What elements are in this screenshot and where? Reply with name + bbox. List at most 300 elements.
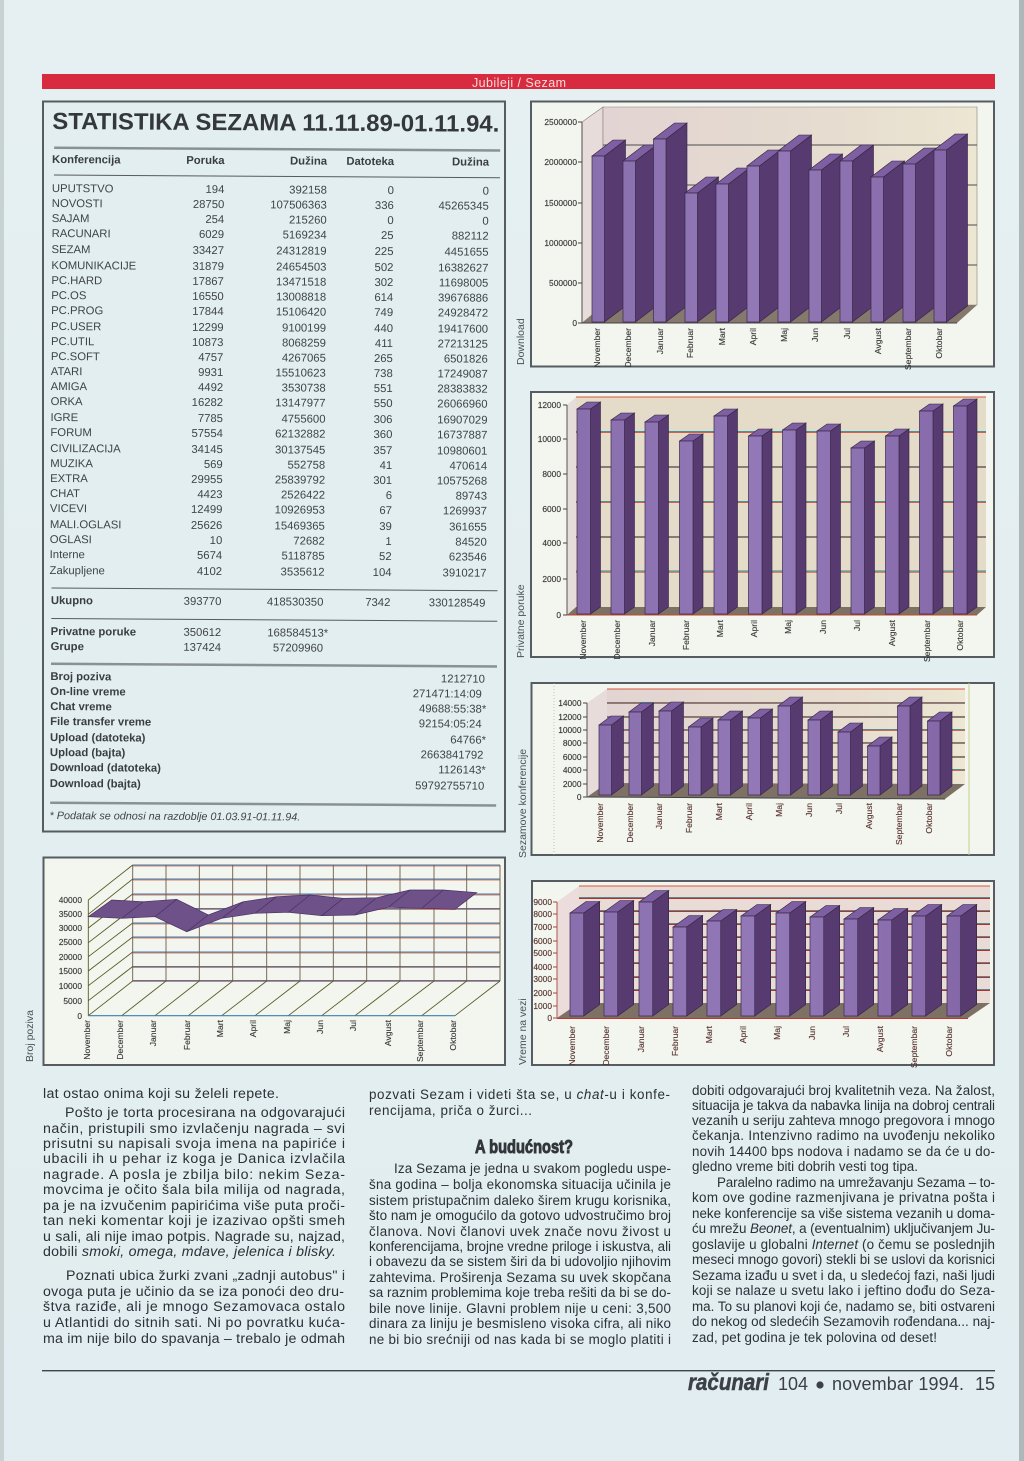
table rows: conferences: 5674 bbox=[197, 550, 222, 562]
table rows: conferences: 24654503 bbox=[276, 261, 326, 274]
month labels: Septembar bbox=[415, 1020, 425, 1062]
table rows: conferences: 738 bbox=[374, 368, 393, 380]
table rows: conferences: 614 bbox=[374, 292, 393, 304]
table rows: conferences: 0 bbox=[387, 215, 394, 227]
month labels: Jul bbox=[834, 803, 844, 814]
y axis labels: 6000 bbox=[542, 504, 561, 514]
table rows: conferences: 569 bbox=[204, 459, 223, 471]
table rows: conferences: 4492 bbox=[198, 382, 223, 394]
table rows: conferences: NOVOSTI bbox=[52, 198, 103, 210]
article column 3 bbox=[692, 1083, 995, 1345]
table rows: conferences: 392158 bbox=[289, 184, 327, 197]
table rows: conferences: 11698005 bbox=[439, 277, 488, 290]
private messages and groups rows bbox=[51, 626, 329, 655]
table rows: conferences: 12499 bbox=[191, 504, 222, 516]
table column headers bbox=[52, 154, 490, 169]
chart: Sezamove konferencije bars bbox=[532, 683, 994, 855]
bars bbox=[570, 890, 977, 1016]
month labels bbox=[592, 327, 944, 370]
table rows: conferences: 33427 bbox=[193, 245, 224, 257]
system totals list: Upload (bajta) bbox=[50, 747, 126, 759]
month labels: Januar bbox=[654, 803, 664, 829]
article column 3: Sezama izađu u svet i da, u sledećoj fazi, naši ljudi bbox=[692, 1268, 995, 1283]
month labels bbox=[578, 619, 965, 662]
month labels: Jul bbox=[852, 620, 862, 631]
table rows: conferences: 24312819 bbox=[276, 245, 327, 258]
table rows: conferences: 215260 bbox=[289, 214, 327, 227]
month labels: Oktobar bbox=[448, 1020, 458, 1051]
article column 3: ma. To su planovi koji će, nadamo se, biti ostvareni bbox=[692, 1299, 995, 1314]
table rows: conferences: 16737887 bbox=[437, 429, 487, 442]
month labels: Jul bbox=[348, 1020, 358, 1031]
totals row: Ukupno: 330128549 bbox=[429, 597, 485, 610]
table rows: conferences: 302 bbox=[374, 277, 393, 289]
y axis labels: 1500000 bbox=[544, 198, 577, 208]
month labels: Avgust bbox=[864, 802, 874, 829]
table rows: conferences: 3530738 bbox=[282, 382, 326, 395]
table rows: conferences: 2526422 bbox=[281, 489, 325, 502]
table rows: conferences: 57554 bbox=[191, 428, 223, 440]
y axis labels: 2000 bbox=[542, 574, 561, 584]
y axis labels: 7000 bbox=[533, 922, 552, 932]
y axis labels: 5000 bbox=[533, 948, 552, 958]
side label: Broj poziva: Broj poziva bbox=[24, 1010, 36, 1062]
table rows: conferences: 72682 bbox=[293, 535, 325, 548]
table rows: conferences: 194 bbox=[206, 184, 224, 196]
table rows: conferences: CHAT bbox=[50, 488, 80, 500]
table rows: conferences: 5118785 bbox=[281, 550, 325, 563]
article column 1: Pošto je torta procesirana na odgovarajući bbox=[65, 1105, 345, 1121]
table rows: conferences: PC.UTIL bbox=[51, 336, 94, 348]
totals row: Ukupno: 393770 bbox=[184, 596, 221, 608]
system totals list: Download (bajta) bbox=[50, 778, 141, 791]
y axis labels: 2000 bbox=[563, 779, 582, 789]
table rows: conferences: 16907029 bbox=[437, 414, 488, 427]
table rows: conferences: EXTRA bbox=[50, 473, 88, 485]
table rows: conferences: 3910217 bbox=[443, 567, 487, 580]
y axis labels: 12000 bbox=[538, 400, 561, 410]
month labels: Februar bbox=[685, 328, 695, 358]
month labels: Maj bbox=[783, 620, 793, 634]
y axis labels bbox=[544, 117, 577, 328]
table rows: conferences: 6 bbox=[386, 490, 392, 502]
y axis labels: 0 bbox=[547, 1013, 552, 1023]
month labels: November bbox=[567, 1026, 577, 1066]
table rows: conferences: UPUTSTVO bbox=[52, 183, 114, 195]
article column 2: sistem pristupačnim daleko širem krugu korisnika, bbox=[369, 1193, 671, 1208]
side label: Privatne poruke: Privatne poruke bbox=[515, 584, 527, 658]
table rows: conferences: 336 bbox=[375, 200, 394, 212]
month labels: April bbox=[748, 328, 758, 345]
article column 3: koji se nalaze u svetu lako i jeftino dođu do Seza- bbox=[692, 1283, 995, 1298]
article column 1: u Atlantidi do sitnih sati. Ni po povratku kuća- bbox=[43, 1315, 345, 1331]
table rows: conferences: 19417600 bbox=[438, 323, 488, 336]
chart: Privatne poruke bars bbox=[531, 392, 994, 662]
table column headers: Dužina bbox=[290, 155, 328, 168]
table rows: conferences: 4451655 bbox=[444, 246, 489, 259]
side label: Sezamove konferencije: Sezamove konferencije bbox=[517, 749, 529, 858]
table rows: conferences: 10873 bbox=[192, 337, 223, 349]
table column headers: Datoteka bbox=[346, 156, 395, 168]
month labels: Jul bbox=[842, 328, 852, 339]
table rows: conferences: 9931 bbox=[198, 367, 223, 379]
table rows: conferences: VICEVI bbox=[50, 503, 87, 515]
article column 3: goslavije u globalni Internet (o čemu se poslednjih bbox=[692, 1237, 995, 1252]
article column 2: bile nove linije. Glavni problem nije u ceni: 3,500 bbox=[369, 1301, 671, 1316]
table rows: conferences: 4423 bbox=[197, 489, 223, 501]
y axis labels: 0 bbox=[572, 318, 577, 328]
table rows: conferences: 107506363 bbox=[270, 199, 327, 212]
table rows: conferences: 13471518 bbox=[276, 276, 326, 289]
table rows: conferences: 29955 bbox=[191, 474, 223, 486]
month labels: Januar bbox=[636, 1026, 646, 1052]
y axis labels: 6000 bbox=[563, 752, 582, 762]
y axis labels: 0 bbox=[556, 610, 561, 620]
system totals list: Download (datoteka) bbox=[50, 762, 161, 775]
system totals list: Broj poziva bbox=[50, 671, 112, 683]
table rows: conferences: 306 bbox=[374, 414, 393, 426]
article column 1: u sali, ali nije imao potpis. Nagrade su, najzad, bbox=[43, 1229, 345, 1245]
y axis labels: 1000 bbox=[533, 1001, 552, 1011]
system totals list: 49688:55:38* bbox=[419, 703, 487, 716]
y axis labels: 2500000 bbox=[544, 117, 577, 127]
article column 3: ću mrežu Beonet, a (eventualnim) uključivanjem Ju- bbox=[692, 1221, 995, 1236]
y axis labels bbox=[533, 897, 552, 1023]
table rows: conferences: CIVILIZACIJA bbox=[50, 443, 121, 455]
month labels: Jun bbox=[804, 803, 814, 817]
article column 2: konferencijama, brojne vredne priloge i iskustva, ali bbox=[369, 1239, 671, 1254]
table rows: conferences: PC.PROG bbox=[51, 305, 103, 317]
private messages and groups rows: 350612 bbox=[183, 627, 221, 639]
article column 1: ma im nije bilo do spavanja – trebalo je odmah bbox=[43, 1331, 345, 1347]
month labels: Avgust bbox=[875, 1025, 885, 1052]
footer: magazine line: 15 bbox=[975, 1374, 995, 1394]
month labels: Jun bbox=[315, 1020, 325, 1034]
y axis labels: 14000 bbox=[558, 698, 582, 708]
article column 3: dobiti odgovarajući broj kvalitetnih veza. Na žalost, bbox=[692, 1083, 995, 1098]
article column 3: zad, pet godina je tek polovina od deset! bbox=[692, 1330, 937, 1345]
subheading: A budućnost?: A budućnost? bbox=[475, 1137, 573, 1157]
table rows: conferences: 6501826 bbox=[444, 353, 488, 366]
table rows: conferences: 265 bbox=[374, 353, 393, 365]
article column 3: kom ove godine razmenjivana je privatna pošta i bbox=[692, 1190, 995, 1205]
month labels: Februar bbox=[670, 1026, 680, 1056]
month labels: Februar bbox=[182, 1020, 192, 1050]
month labels: Septembar bbox=[909, 1026, 919, 1068]
month labels: Februar bbox=[681, 620, 691, 650]
private messages and groups rows: 168584513* bbox=[267, 627, 329, 640]
article column 3: neke konferencije sa više sistema vezanih u doma- bbox=[692, 1206, 995, 1221]
system totals list: On-line vreme bbox=[50, 686, 126, 698]
article column 3: situacija je takva da nabavka linija na dobroj centrali bbox=[692, 1098, 995, 1113]
article column 1: prisutni su napisali svoja imena na papiriće i bbox=[43, 1136, 345, 1152]
table rows: conferences: 502 bbox=[375, 262, 393, 274]
table rows: conferences: PC.HARD bbox=[51, 275, 102, 287]
table rows: conferences: ATARI bbox=[51, 366, 82, 378]
table rows: conferences: 4757 bbox=[198, 352, 223, 364]
y axis labels: 8000 bbox=[563, 738, 582, 748]
article column 2: sa raznim problemima koje treba rešiti da bi se do- bbox=[369, 1285, 671, 1300]
month labels: December bbox=[625, 803, 635, 843]
table rows: conferences: 15106420 bbox=[276, 306, 326, 319]
month labels: Maj bbox=[282, 1020, 292, 1034]
y axis labels: 20000 bbox=[59, 952, 82, 962]
table rows: conferences: 4755600 bbox=[281, 413, 326, 426]
month labels: Septembar bbox=[922, 620, 932, 662]
article column 3: vezanih u seriju zahteva mnogo pregovora i mnogo bbox=[692, 1113, 995, 1128]
system totals list: 1126143* bbox=[438, 764, 486, 777]
article column 2: članova. Novi članovi uvek znače novu živost u bbox=[369, 1224, 671, 1239]
month labels: Januar bbox=[655, 328, 665, 354]
table rows: conferences: RACUNARI bbox=[52, 228, 111, 240]
table rows: conferences: 0 bbox=[483, 186, 489, 198]
totals row: Ukupno: 7342 bbox=[365, 597, 390, 609]
table rows: conferences: 15469365 bbox=[275, 520, 325, 533]
table rows: conferences: 440 bbox=[374, 323, 393, 335]
table rows: conferences: KOMUNIKACIJE bbox=[51, 260, 137, 273]
month labels: Maj bbox=[779, 328, 789, 342]
bars bbox=[599, 697, 952, 795]
table rows: conferences: SAJAM bbox=[52, 213, 89, 225]
table rows: conferences: 254 bbox=[205, 214, 224, 226]
table rows: conferences: 16382627 bbox=[438, 262, 488, 275]
chart: Download bars bbox=[531, 102, 994, 370]
table rows: conferences: 26066960 bbox=[437, 398, 488, 411]
table rows: conferences: 10926953 bbox=[275, 504, 325, 517]
table rows: conferences: 30137545 bbox=[275, 444, 325, 457]
article column 2: rencijama, priča o žurci... bbox=[369, 1103, 532, 1118]
month labels: Mart bbox=[215, 1019, 225, 1037]
y axis labels: 0 bbox=[577, 792, 582, 802]
totals row: Ukupno bbox=[51, 595, 485, 610]
footer: magazine line bbox=[42, 1369, 995, 1395]
month labels: Maj bbox=[772, 1026, 782, 1040]
y axis labels: 6000 bbox=[533, 936, 552, 946]
y axis labels: 25000 bbox=[59, 937, 82, 947]
bars bbox=[592, 123, 968, 322]
table rows: conferences: 25839792 bbox=[275, 474, 325, 487]
y axis labels: 5000 bbox=[63, 996, 82, 1006]
system totals list: 64766* bbox=[450, 734, 487, 747]
month labels bbox=[567, 1025, 954, 1068]
table rows: conferences: 104 bbox=[373, 567, 392, 579]
table rows: conferences: 225 bbox=[375, 246, 394, 258]
table rows: conferences: 28750 bbox=[193, 199, 224, 211]
article column 1: tan neki komentar koji je izazivao opšti smeh bbox=[43, 1213, 345, 1229]
article column 1: lat ostao onima koji su želeli repete. bbox=[43, 1086, 279, 1102]
month labels: Avgust bbox=[873, 327, 883, 354]
area ribbon bbox=[88, 890, 477, 932]
totals row: Ukupno: Ukupno bbox=[51, 595, 93, 607]
table rows: conferences: 25 bbox=[381, 230, 394, 242]
y axis labels: 4000 bbox=[542, 538, 561, 548]
table rows: conferences: 39 bbox=[379, 521, 392, 533]
chart: Broj poziva 3D area bbox=[44, 858, 505, 1065]
table rows: conferences: 749 bbox=[374, 307, 393, 319]
table rows: conferences: FORUM bbox=[50, 427, 92, 439]
table rows: conferences: 12299 bbox=[192, 322, 224, 334]
y axis labels: 40000 bbox=[59, 895, 82, 905]
month labels: December bbox=[623, 328, 633, 368]
table rows: conferences: 27213125 bbox=[438, 338, 488, 351]
table rows: conferences: 4102 bbox=[197, 566, 222, 578]
article column 3: meseci mnogo govori) stekli bi se uslovi da korisnici bbox=[692, 1252, 995, 1267]
system totals list: File transfer vreme bbox=[50, 716, 151, 729]
footer: magazine line: računari bbox=[688, 1369, 770, 1395]
table rows: conferences: 31879 bbox=[192, 261, 224, 273]
article column 3: gledno vreme biti dobrih vesti tog tipa. bbox=[692, 1159, 918, 1174]
table rows: conferences: 10575268 bbox=[437, 475, 487, 488]
system totals list: 92154:05:24 bbox=[419, 718, 482, 731]
month labels: Oktobar bbox=[944, 1026, 954, 1057]
side label: Vreme na vezi: Vreme na vezi bbox=[517, 998, 529, 1065]
month labels: Mart bbox=[714, 802, 724, 820]
system totals list: Upload (datoteka) bbox=[50, 732, 146, 745]
article column 1: nagrade. A posla je zbilja bilo: nekim Seza- bbox=[43, 1167, 345, 1183]
month labels: Januar bbox=[148, 1020, 158, 1046]
table rows: conferences: AMIGA bbox=[51, 381, 88, 393]
side label: Download: Download bbox=[515, 318, 527, 365]
month labels: Avgust bbox=[887, 619, 897, 646]
month labels: April bbox=[749, 620, 759, 637]
article column 1: dobili smoki, omega, mdave, jelenica i blisky. bbox=[43, 1244, 336, 1260]
y axis labels: 8000 bbox=[533, 909, 552, 919]
totals row: Ukupno: 418530350 bbox=[267, 596, 323, 609]
y axis labels: 2000 bbox=[533, 988, 552, 998]
table rows: conferences: 301 bbox=[373, 475, 392, 487]
month labels: April bbox=[248, 1020, 258, 1037]
month labels: Oktobar bbox=[934, 328, 944, 359]
article column 1: štva raziđe, ali je mnogo Sezamovaca ostalo bbox=[43, 1299, 345, 1315]
table rows: conferences: PC.SOFT bbox=[51, 351, 100, 363]
table rows: conferences: 62132882 bbox=[275, 428, 325, 441]
table rows: conferences: 623546 bbox=[449, 551, 487, 564]
article column 1 bbox=[43, 1086, 345, 1347]
table rows: conferences: 6029 bbox=[199, 229, 224, 241]
table rows: conferences: 17867 bbox=[192, 276, 224, 288]
table rows: conferences: 552758 bbox=[287, 459, 325, 472]
section banner: Jubileji / Sezam bbox=[42, 74, 995, 90]
month labels: Jun bbox=[807, 1026, 817, 1040]
y axis labels: 4000 bbox=[533, 962, 552, 972]
table rows: conferences: 0 bbox=[388, 185, 394, 197]
table rows: conferences: 4267065 bbox=[282, 352, 326, 365]
month labels bbox=[595, 802, 934, 845]
table column headers: Konferencija bbox=[52, 154, 121, 166]
article column 3: do nekog od sledećih Sezamovih rođendana... naj- bbox=[692, 1314, 995, 1329]
table rows: conferences: 882112 bbox=[452, 230, 489, 243]
article column 2: što nam je omogućilo da gotovo udvostručimo broj bbox=[369, 1208, 671, 1223]
table rows: conferences: 67 bbox=[379, 505, 392, 517]
section banner: Jubileji / Sezam: Jubileji / Sezam bbox=[472, 76, 566, 90]
table rows: conferences: 28383832 bbox=[437, 383, 488, 396]
month labels: November bbox=[592, 328, 602, 368]
month labels: November bbox=[578, 620, 588, 660]
table rows: conferences: 34145 bbox=[191, 444, 223, 456]
article column 3: Paralelno radimo na umrežavanju Sezama – to- bbox=[717, 1175, 995, 1190]
article column 2: ne bi bio srećniji od nas kada bi se moglo platiti i bbox=[369, 1332, 671, 1347]
month labels: Oktobar bbox=[924, 803, 934, 834]
table rows: conferences: 9100199 bbox=[282, 322, 326, 335]
article column 3: novih 14400 bps nodova i nadamo se da će u do- bbox=[692, 1144, 995, 1159]
system totals list: 59792755710 bbox=[415, 780, 484, 793]
table rows: conferences: 84520 bbox=[455, 536, 487, 549]
y axis labels: 15000 bbox=[59, 966, 82, 976]
table rows: conferences: PC.USER bbox=[51, 321, 101, 333]
footnote: * Podatak se odnosi na razdoblje 01.03.91-01.11.94. bbox=[50, 810, 300, 824]
y axis labels: 1000000 bbox=[544, 238, 577, 248]
month labels: Mart bbox=[717, 327, 727, 345]
table rows: conferences: ORKA bbox=[51, 396, 83, 408]
month labels: Januar bbox=[647, 620, 657, 646]
table rows: conferences: IGRE bbox=[50, 412, 79, 424]
table rows: conferences: 411 bbox=[375, 338, 393, 350]
y axis labels: 35000 bbox=[59, 909, 82, 919]
table rows: conferences: 550 bbox=[374, 398, 393, 410]
bars bbox=[577, 399, 977, 614]
table rows: conferences: MUZIKA bbox=[50, 458, 93, 470]
table title: STATISTIKA SEZAMA 11.11.89-01.11.94. bbox=[52, 108, 499, 137]
system totals list: 2663841792 bbox=[421, 749, 483, 762]
table rows: conferences: 470614 bbox=[449, 460, 487, 473]
y axis labels: 0 bbox=[77, 1011, 82, 1021]
table rows: conferences: 0 bbox=[482, 216, 489, 228]
table rows: conferences: 13147977 bbox=[275, 397, 326, 410]
month labels: Jul bbox=[841, 1026, 851, 1037]
y axis labels: 3000 bbox=[533, 974, 552, 984]
article column 3: čekanja. Intenzivno radimo na uvođenju nekoliko bbox=[692, 1128, 995, 1143]
y axis labels: 500000 bbox=[549, 278, 577, 288]
month labels: April bbox=[738, 1026, 748, 1043]
chart: Vreme na vezi bars bbox=[532, 881, 994, 1068]
table rows: conferences: 551 bbox=[374, 383, 393, 395]
table rows: conferences: 7785 bbox=[198, 413, 223, 425]
month labels: November bbox=[595, 803, 605, 843]
table rows: conferences: PC.OS bbox=[51, 290, 87, 302]
y axis labels: 2000000 bbox=[544, 157, 577, 167]
article column 1: ovoga puta je učinio da se iza ponoći deo dru- bbox=[43, 1284, 344, 1300]
table rows: conferences: 3535612 bbox=[281, 566, 325, 579]
table rows: conferences: 357 bbox=[373, 445, 392, 457]
month labels: Jun bbox=[810, 328, 820, 342]
y axis labels bbox=[538, 400, 561, 620]
y axis labels: 8000 bbox=[542, 469, 561, 479]
private messages and groups rows: Privatne poruke bbox=[51, 626, 136, 639]
table rows: conferences: 16282 bbox=[192, 397, 223, 409]
month labels: Mart bbox=[715, 619, 725, 637]
article column 2: dinara za liniju je besmisleno visoka cifra, ali niko bbox=[369, 1316, 671, 1331]
table rows: conferences: OGLASI bbox=[50, 534, 92, 546]
table rows: conferences: 17249087 bbox=[437, 368, 488, 381]
table rows: conferences: 39676886 bbox=[438, 292, 488, 305]
month labels: Avgust bbox=[383, 1019, 393, 1046]
y axis labels: 10000 bbox=[558, 725, 582, 735]
system totals list: 1212710 bbox=[441, 673, 485, 686]
table rows: conferences: 1269937 bbox=[443, 505, 487, 518]
private messages and groups rows: Grupe bbox=[51, 641, 84, 653]
table column headers: Dužina bbox=[452, 156, 490, 169]
table column headers: Poruka bbox=[186, 155, 225, 167]
article column 1: ubacili ih u pehar iz koga je Danica izvlačila bbox=[43, 1151, 345, 1167]
table rows: conferences: 10 bbox=[210, 535, 222, 547]
article column 1: način, pristupili smo izvlačenju nagrada – svi bbox=[43, 1121, 345, 1137]
private messages and groups rows: 57209960 bbox=[273, 642, 323, 655]
table rows: conferences: 16550 bbox=[192, 291, 224, 303]
table rows: conferences: 10980601 bbox=[437, 445, 487, 458]
y axis labels bbox=[59, 895, 82, 1021]
month labels: November bbox=[82, 1020, 92, 1060]
y axis labels: 10000 bbox=[59, 981, 82, 991]
